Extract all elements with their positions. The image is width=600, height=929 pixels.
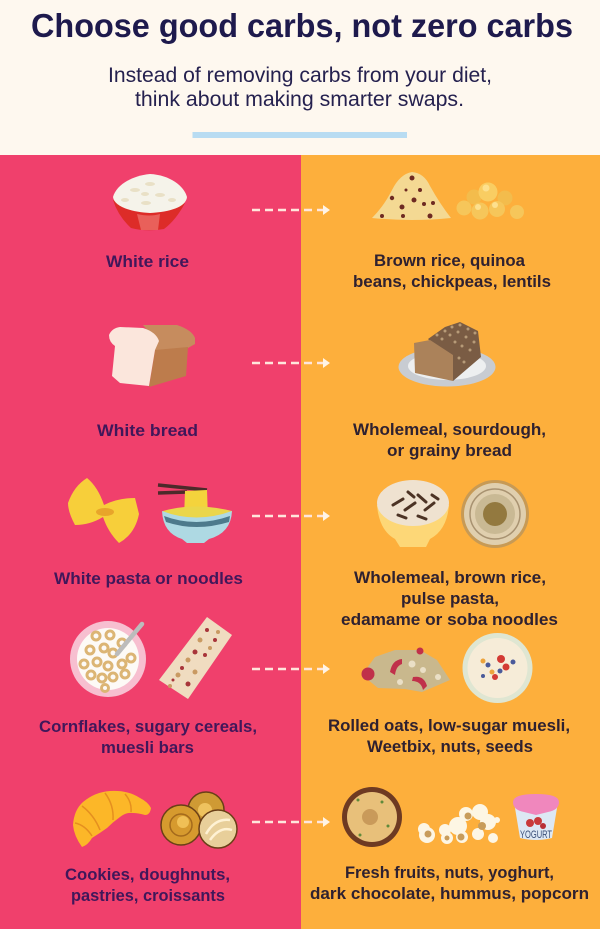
label: cornflakes and cereals <box>39 718 257 757</box>
panel: smarter swaps column <box>301 155 600 929</box>
icon: farfalle pasta <box>68 478 139 543</box>
arrow: white rice to swaps <box>252 205 330 215</box>
label: rolled oats and muesli <box>328 717 570 756</box>
icon: popcorn <box>418 804 500 844</box>
icon: cereal bowl with spoon <box>70 621 146 697</box>
label: cornflakes and cereals: muesli bars <box>101 739 194 757</box>
icon: wild rice bowl <box>377 480 449 547</box>
arrow: cereals to swaps <box>252 664 330 674</box>
icon: hummus bowl <box>342 787 402 847</box>
label: cookies and pastries: Cookies, doughnuts, <box>65 866 230 884</box>
icon: pastry buns <box>161 792 237 848</box>
arrow: white bread to swaps <box>252 358 330 368</box>
label: wholemeal and pulse pasta: edamame or soba noodles <box>341 611 558 629</box>
icon: chickpeas <box>456 182 524 220</box>
label: white bread: White bread <box>97 422 198 440</box>
icon: croissant <box>73 791 151 847</box>
label: wholemeal and sourdough: or grainy bread <box>387 442 512 460</box>
label: cornflakes and cereals: Cornflakes, sugary cereals, <box>39 718 257 736</box>
label: fresh fruits and snacks: Fresh fruits, nuts, yoghurt, <box>345 864 554 882</box>
arrow: pasta to swaps <box>252 511 330 521</box>
label: brown rice and legumes <box>353 252 551 291</box>
title: Choose good carbs, not zero carbs <box>31 7 573 44</box>
label: wholemeal and pulse pasta: pulse pasta, <box>401 590 499 608</box>
label: white pasta or noodles: White pasta or noodles <box>54 570 243 588</box>
subtitle <box>108 64 492 111</box>
label: white rice: White rice <box>106 253 189 271</box>
label: wholemeal and sourdough <box>353 421 546 460</box>
label: wholemeal and pulse pasta: Wholemeal, brown rice, <box>354 569 546 587</box>
icon: rolled oats pile <box>362 648 450 692</box>
icon: yogurt pot: YOGURT <box>520 829 552 841</box>
label: brown rice and legumes: Brown rice, quinoa <box>374 252 526 270</box>
icon: wholegrain loaf on plate <box>398 322 496 386</box>
icon: noodle bowl <box>158 485 232 543</box>
icon: white bread loaf <box>109 325 195 387</box>
label: wholemeal and pulse pasta <box>341 569 558 629</box>
label: fresh fruits and snacks: dark chocolate, hummus, popcorn <box>310 885 589 903</box>
label: rolled oats and muesli: Weetbix, nuts, seeds <box>367 738 533 756</box>
icon: white rice bowl <box>113 174 187 230</box>
header accent bar <box>192 132 407 138</box>
subtitle: Instead of removing carbs from your diet, <box>108 64 492 87</box>
label: brown rice and legumes: beans, chickpeas, lentils <box>353 273 551 291</box>
label: cookies and pastries: pastries, croissants <box>71 887 225 905</box>
icon: soba noodle plate <box>461 480 529 548</box>
label: fresh fruits and snacks <box>310 864 589 903</box>
icon: yogurt pot <box>513 794 559 841</box>
panel: refined carbs column <box>0 155 301 929</box>
icon: porridge bowl with berries <box>462 633 532 703</box>
label: cookies and pastries <box>65 866 230 905</box>
subtitle: think about making smarter swaps. <box>135 88 464 111</box>
arrow: pastries to swaps <box>252 817 330 827</box>
label: rolled oats and muesli: Rolled oats, low-sugar muesli, <box>328 717 570 735</box>
icon: muesli bar <box>159 617 232 699</box>
icon: quinoa pile <box>372 172 451 220</box>
label: wholemeal and sourdough: Wholemeal, sourdough, <box>353 421 546 439</box>
